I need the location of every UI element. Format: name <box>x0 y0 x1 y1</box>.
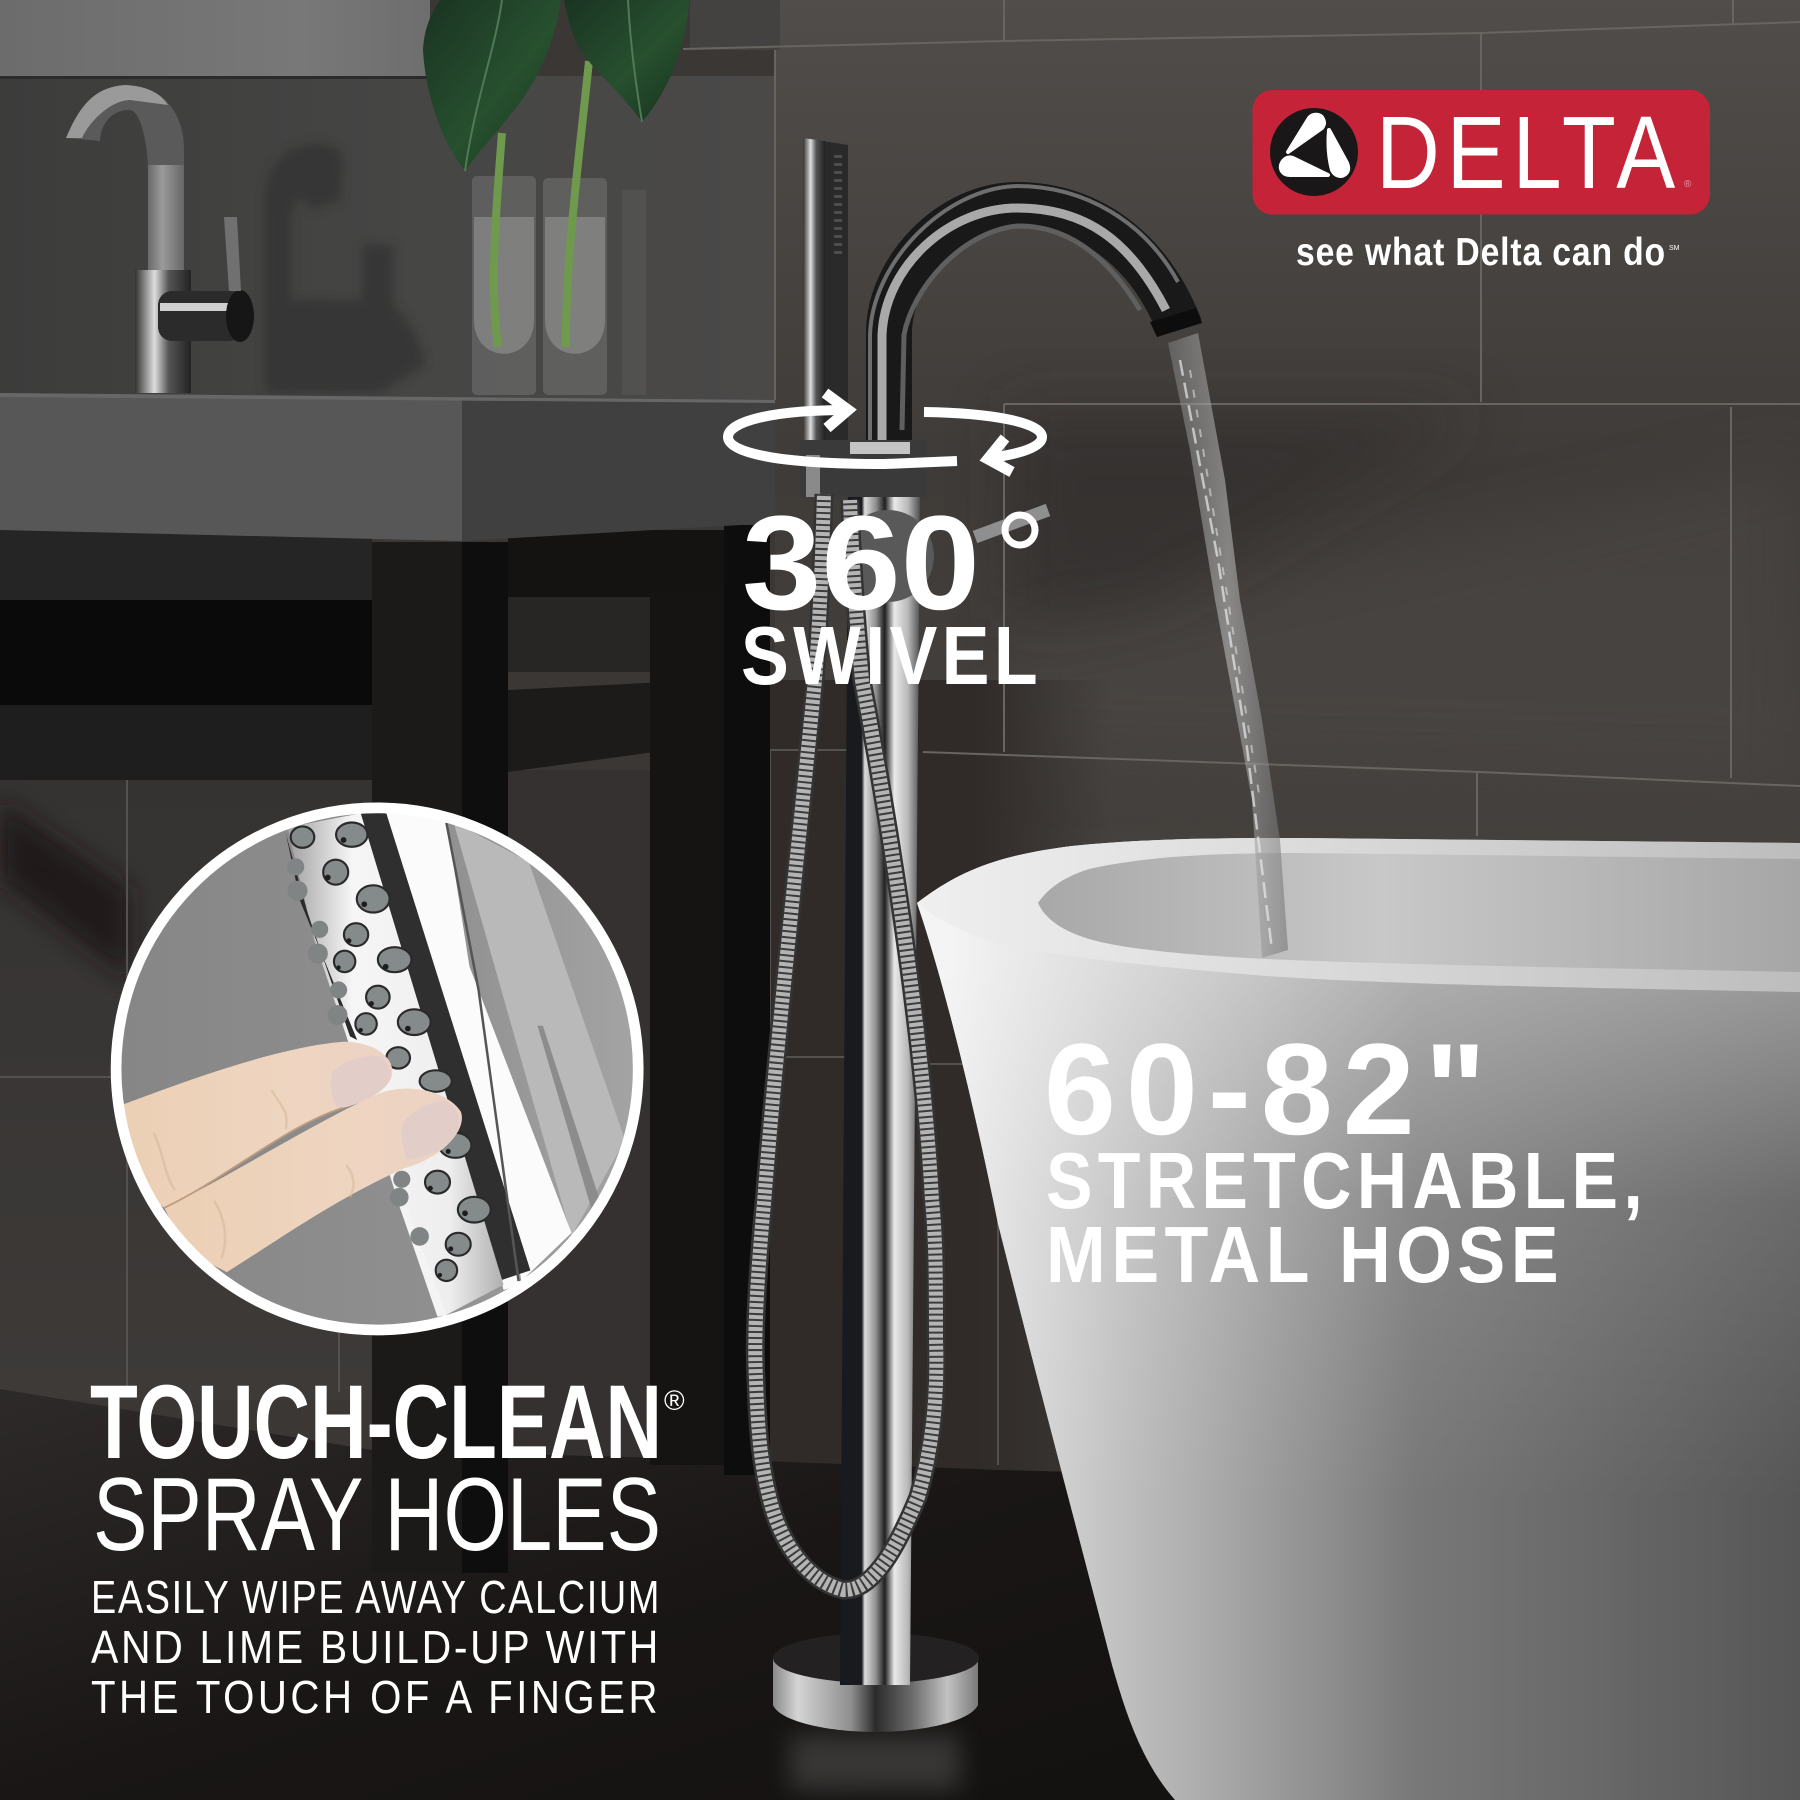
heading: 360 swivel <box>741 489 1042 702</box>
vanity table frame <box>0 525 770 1573</box>
description text <box>91 1571 661 1723</box>
logo: Delta red badge: DELTA <box>1376 95 1682 210</box>
bathtub <box>917 838 1800 1800</box>
heading: hose length <box>1044 1016 1648 1299</box>
description text: AND LIME BUILD-UP WITH <box>91 1621 661 1673</box>
fingers <box>114 1042 462 1272</box>
heading: hose length: 60-82" <box>1044 1016 1496 1162</box>
logo: Delta red badge <box>1252 90 1710 214</box>
heading: 360 swivel: SWIVEL <box>741 609 1042 702</box>
pole <box>840 490 920 1685</box>
tub filler faucet <box>755 138 1202 1790</box>
logo: Delta red badge: ® <box>1684 179 1692 190</box>
heading: touch-clean spray holes <box>90 1364 685 1573</box>
heading: touch-clean spray holes: ® <box>664 1385 685 1416</box>
callout: touch-clean spray holes circular inset <box>114 808 638 1330</box>
heading: hose length: STRETCHABLE, <box>1046 1136 1648 1225</box>
spray holes <box>291 822 491 1281</box>
heading: hose length: METAL HOSE <box>1046 1210 1564 1299</box>
description text: THE TOUCH OF A FINGER <box>91 1671 661 1723</box>
tagline: see what Delta can do <box>1296 231 1666 274</box>
description text: EASILY WIPE AWAY CALCIUM <box>91 1571 661 1623</box>
glass vases with stems <box>472 61 646 395</box>
leaves <box>423 0 689 171</box>
heading: touch-clean spray holes: SPRAY HOLES <box>93 1457 661 1573</box>
sink faucet <box>66 85 254 393</box>
swivel mount and valve <box>800 440 1048 602</box>
tagline: SM <box>1669 245 1680 252</box>
heading: 360 swivel: 360 <box>742 489 980 638</box>
gooseneck spout <box>870 186 1180 445</box>
icon: Delta triangle mark <box>1270 108 1358 196</box>
base plate <box>773 1633 979 1732</box>
sink faucet shadow on wall <box>265 144 425 393</box>
shower hose <box>755 494 936 1590</box>
counter top <box>0 393 775 541</box>
water stream <box>1168 333 1288 958</box>
hand shower <box>803 138 848 445</box>
icon: 360 degree rotation arrows <box>728 393 1042 472</box>
floor reflection <box>790 1735 960 1790</box>
heading: touch-clean spray holes: TOUCH-CLEAN <box>90 1364 662 1481</box>
